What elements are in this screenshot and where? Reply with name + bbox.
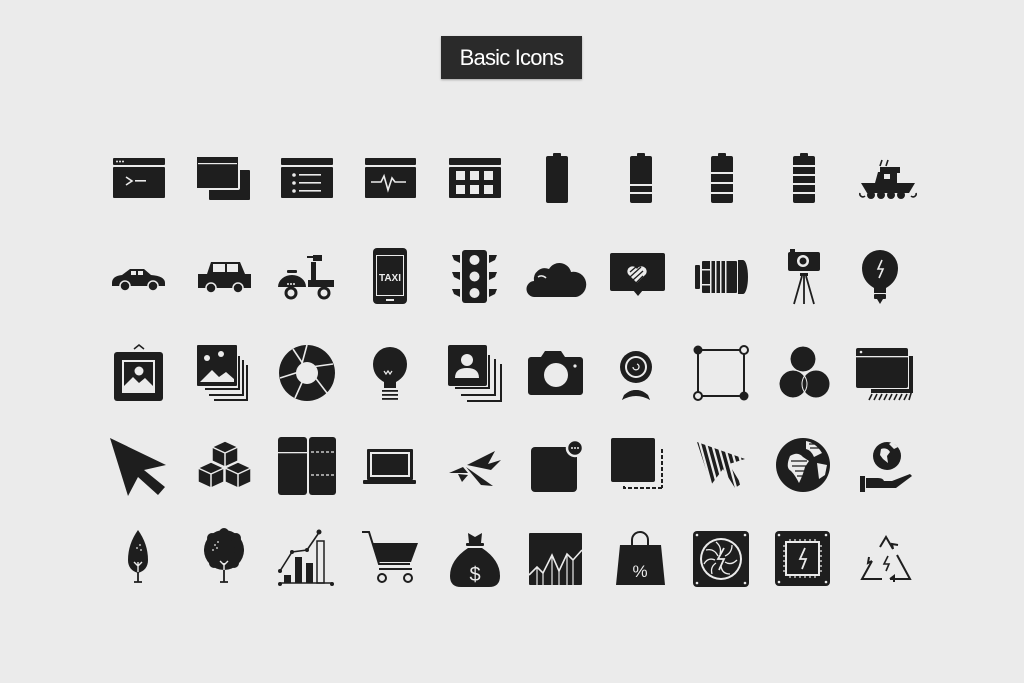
icon: terminal window	[113, 158, 165, 198]
icon: cubes	[198, 441, 251, 488]
icon: battery 2	[711, 153, 733, 203]
icon: shopping cart	[362, 532, 418, 582]
icon: recycle	[862, 537, 910, 582]
icon: picture frame	[114, 345, 163, 401]
icon: pulse window	[365, 158, 416, 198]
icon: chart square	[529, 533, 582, 585]
icon: tree round	[204, 528, 244, 582]
icon: chip	[775, 531, 830, 586]
icon: photo stack	[197, 345, 247, 400]
icon: aperture	[279, 345, 335, 401]
icon: battery empty	[546, 153, 568, 203]
icon: square with dashed shadow	[611, 438, 662, 488]
icon: money bag: $	[469, 564, 481, 586]
icon: taxi phone	[373, 248, 407, 304]
icon: cursor arrow	[110, 438, 166, 496]
icon: crop square	[694, 346, 748, 400]
icon: battery full	[793, 153, 815, 203]
icon: tree narrow	[128, 530, 148, 582]
icon: bar line chart	[278, 530, 334, 586]
icon: square with bubble	[531, 440, 583, 492]
icon: fan	[693, 531, 749, 587]
icon: car small	[112, 269, 165, 291]
icon: cloud	[526, 263, 586, 297]
icon: money bag	[450, 533, 500, 587]
icon: two windows	[196, 156, 250, 200]
icon: tripod camera	[788, 249, 820, 304]
icon: grid window	[449, 158, 501, 198]
icon: hand with globe	[860, 442, 912, 492]
icon: list window	[281, 158, 333, 198]
icon: lightbulb	[373, 347, 407, 400]
icon: boat	[860, 160, 916, 199]
icon: scooter	[278, 255, 334, 298]
icon: bulb bolt	[862, 250, 898, 304]
icon: battery 1	[630, 153, 652, 203]
icon: venn circles	[779, 346, 830, 398]
icon: globe	[776, 438, 830, 492]
icon grid	[110, 153, 917, 587]
icon: laptop	[363, 449, 416, 484]
icon: taxi phone: TAXI	[379, 273, 401, 284]
icon: heart chat	[610, 253, 665, 296]
icon: lens	[695, 260, 748, 294]
icon: striped cursor	[697, 442, 745, 488]
title	[441, 36, 582, 79]
icon: shopping bag percent	[616, 532, 665, 585]
icon: traffic light	[452, 250, 497, 303]
icon: contacts stack	[448, 345, 501, 401]
icon: shopping bag percent: %	[632, 562, 648, 581]
icon: camera	[528, 351, 583, 395]
title: Basic Icons	[460, 45, 563, 70]
icon: webcam	[620, 348, 652, 400]
icon: origami bird	[449, 451, 501, 486]
icon: window stack striped	[856, 348, 913, 400]
icon: split panel	[278, 437, 336, 495]
icon: car large	[198, 262, 251, 293]
